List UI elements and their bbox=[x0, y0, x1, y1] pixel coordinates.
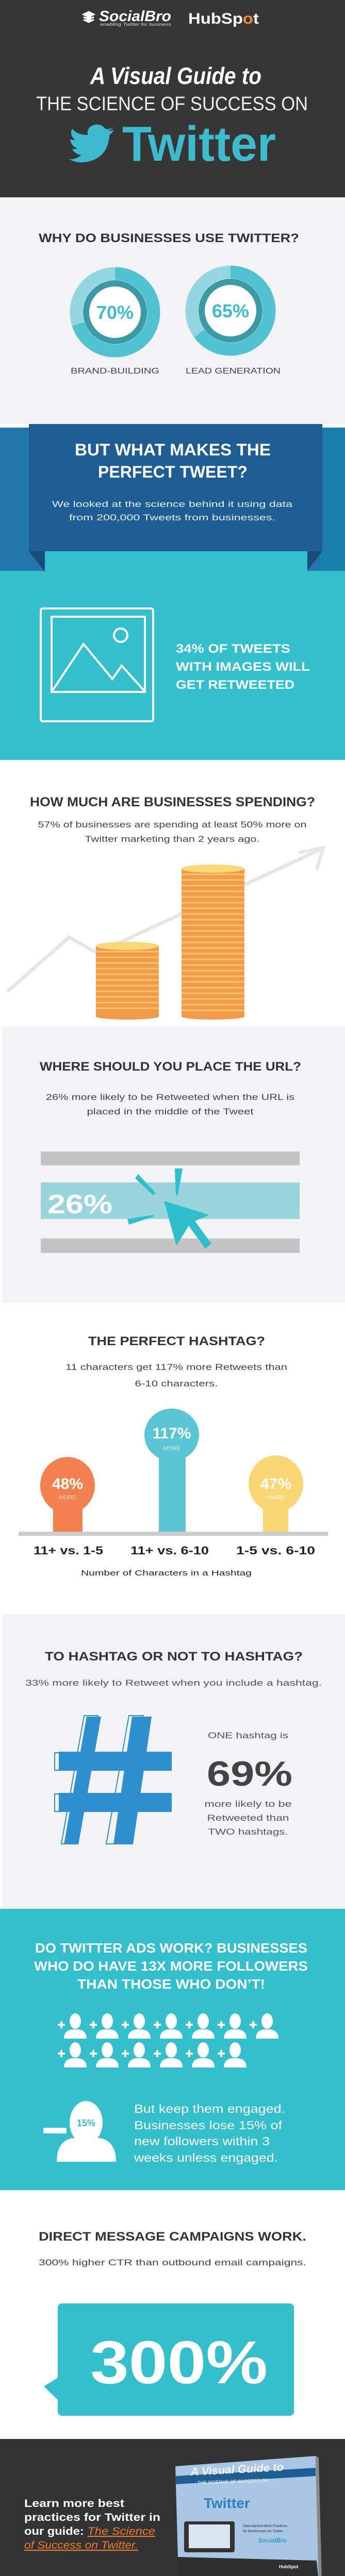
donut: 65%: 65% bbox=[212, 300, 249, 321]
panel: perfect hashtag: 6-10 characters. bbox=[135, 1379, 218, 1388]
chart: URL bars bbox=[41, 1151, 300, 1253]
lollipop 47%: 47% bbox=[260, 1476, 291, 1493]
heading: WHERE SHOULD YOU PLACE THE URL? bbox=[40, 1060, 301, 1074]
text: 300% higher CTR than outbound email campaigns. bbox=[39, 2258, 306, 2267]
panel: twitter ads bbox=[0, 1909, 345, 2190]
book cover: THE SCIENCE OF SUCCESS ON bbox=[198, 2478, 269, 2485]
text: keep engaged: But keep them engaged. bbox=[134, 2102, 285, 2115]
footer panel bbox=[0, 2439, 345, 2576]
chart: lollipop bars bbox=[19, 1409, 328, 1578]
icon: follower rows bbox=[58, 2013, 278, 2067]
lollipop 117%: MORE bbox=[163, 1446, 180, 1452]
panel: direct message bbox=[0, 2190, 345, 2439]
title script: A Visual Guide to bbox=[90, 62, 261, 89]
chart: coin stack large bbox=[182, 865, 244, 1020]
title Twitter: Twitter bbox=[122, 116, 276, 172]
stat: 69%: TWO hashtags. bbox=[208, 1827, 288, 1837]
text: keep engaged: Businesses lose 15% of bbox=[134, 2119, 283, 2132]
text: 33% more likely to Retweet when you include a hashtag. bbox=[25, 1678, 322, 1688]
banner heading: BUT WHAT MAKES THE bbox=[75, 440, 271, 459]
book cover: A Visual Guide to bbox=[190, 2461, 284, 2478]
heading: WHY DO BUSINESSES USE TWITTER? bbox=[39, 231, 299, 245]
heading: DO TWITTER ADS WORK? BUSINESSES bbox=[35, 1940, 307, 1956]
heading: DIRECT MESSAGE CAMPAIGNS WORK. bbox=[39, 2230, 306, 2244]
panel: images bbox=[0, 572, 345, 760]
stat: 69%: 69% bbox=[207, 1754, 292, 1793]
chart: coin stack small bbox=[96, 942, 159, 1020]
header panel bbox=[0, 0, 345, 197]
icon: hashtag bbox=[55, 1716, 171, 1844]
donut: 65% bbox=[192, 272, 269, 349]
stat text: WITH IMAGES WILL bbox=[176, 660, 310, 674]
icon: cursor click bbox=[127, 1168, 211, 1249]
heading: WHO DO HAVE 13X MORE FOLLOWERS bbox=[34, 1958, 308, 1974]
panel: spending bbox=[0, 760, 345, 1026]
panel: perfect hashtag bbox=[0, 1303, 345, 1614]
text: 26% more likely to be Retweeted when the URL is bbox=[46, 1092, 294, 1102]
footer text: of Success on Twitter. bbox=[24, 2539, 138, 2551]
lollipop 117% bbox=[144, 1409, 199, 1532]
lollipop 47%: MORE bbox=[267, 1495, 285, 1501]
stat text: GET RETWEETED bbox=[176, 678, 294, 692]
icon: twitter bird bbox=[69, 125, 114, 162]
callout: 300% bubble: 300% bbox=[90, 2329, 268, 2397]
icon: losing follower 15% bbox=[43, 2101, 116, 2162]
text: keep engaged bbox=[134, 2102, 285, 2164]
footer text bbox=[24, 2498, 160, 2551]
axis labels: 11+ vs. 1-5 bbox=[34, 1544, 103, 1557]
footer text: our guide: The Science bbox=[24, 2526, 155, 2537]
book cover bbox=[175, 2456, 322, 2576]
book cover: SocialBro bbox=[258, 2537, 287, 2544]
text: keep engaged: weeks unless engaged. bbox=[134, 2151, 278, 2164]
heading: THE PERFECT HASHTAG? bbox=[88, 1334, 265, 1348]
stat: 69%: more likely to be bbox=[204, 1799, 292, 1809]
footer text: practices for Twitter in bbox=[24, 2512, 160, 2523]
lollipop 48%: 48% bbox=[52, 1476, 83, 1493]
logo: SocialBro: enabling Twitter for business bbox=[100, 22, 171, 27]
heading: HOW MUCH ARE BUSINESSES SPENDING? bbox=[30, 795, 315, 809]
logo: SocialBro: SocialBro bbox=[99, 8, 171, 25]
panel: why businesses use twitter bbox=[0, 197, 345, 424]
lollipop 47% bbox=[249, 1455, 303, 1532]
text: 57% of businesses are spending at least 50% more on bbox=[38, 820, 306, 829]
heading bbox=[34, 1940, 308, 1992]
banner text: We looked at the science behind it using data bbox=[52, 499, 293, 509]
label brand-building: BRAND-BUILDING bbox=[71, 367, 159, 376]
stat: 69%: Retweeted than bbox=[207, 1813, 289, 1823]
panel: spending: Twitter marketing than 2 years ago. bbox=[85, 834, 260, 844]
arrow: growth line bbox=[7, 848, 323, 992]
footer text: Learn more best bbox=[24, 2498, 124, 2510]
book cover: Data-backed Best Practices bbox=[243, 2524, 288, 2528]
book cover: Twitter bbox=[204, 2495, 250, 2511]
icon: losing follower 15%: 15% bbox=[77, 2118, 95, 2128]
banner: perfect tweet: PERFECT TWEET? bbox=[98, 463, 248, 481]
banner: perfect tweet bbox=[0, 424, 345, 573]
title line: THE SCIENCE OF SUCCESS ON bbox=[36, 93, 308, 115]
lollipop 48%: MORE bbox=[59, 1495, 76, 1501]
icon: image frame bbox=[41, 608, 153, 721]
book cover: HubSpot bbox=[279, 2564, 298, 2569]
stat text bbox=[176, 642, 310, 692]
panel: URL placement bbox=[2, 1026, 345, 1303]
axis labels: 1-5 vs. 6-10 bbox=[236, 1544, 315, 1557]
axis labels: 11+ vs. 6-10 bbox=[130, 1544, 209, 1557]
text: 11 characters get 117% more Retweets than bbox=[65, 1362, 287, 1372]
chart: lollipop bars: Number of Characters in a Hashtag bbox=[81, 1569, 252, 1578]
panel: to hashtag or not bbox=[2, 1614, 345, 1909]
donut: 70% bbox=[76, 274, 154, 351]
stat text: 34% OF TWEETS bbox=[176, 642, 290, 656]
axis labels bbox=[34, 1544, 315, 1557]
book cover: for Businesses on Twitter bbox=[243, 2530, 284, 2533]
lollipop 117%: 117% bbox=[152, 1425, 191, 1442]
text: keep engaged: new followers within 3 bbox=[134, 2134, 270, 2148]
heading: THAN THOSE WHO DON’T! bbox=[77, 1976, 265, 1992]
panel: URL placement: placed in the middle of the Tweet bbox=[87, 1107, 254, 1116]
banner: perfect tweet: from 200,000 Tweets from businesses. bbox=[69, 513, 275, 522]
logo: HubSpot: HubSp ot bbox=[188, 10, 259, 27]
heading: TO HASHTAG OR NOT TO HASHTAG? bbox=[45, 1650, 303, 1664]
stat: 69%: ONE hashtag is bbox=[208, 1731, 288, 1740]
stat: 69% bbox=[204, 1731, 292, 1837]
chart: URL bars: 26% bbox=[47, 1190, 112, 1219]
donut: 70%: 70% bbox=[96, 302, 134, 323]
label lead generation: LEAD GENERATION bbox=[186, 367, 281, 376]
callout: 300% bubble bbox=[44, 2303, 294, 2416]
lollipop 48% bbox=[40, 1457, 95, 1532]
